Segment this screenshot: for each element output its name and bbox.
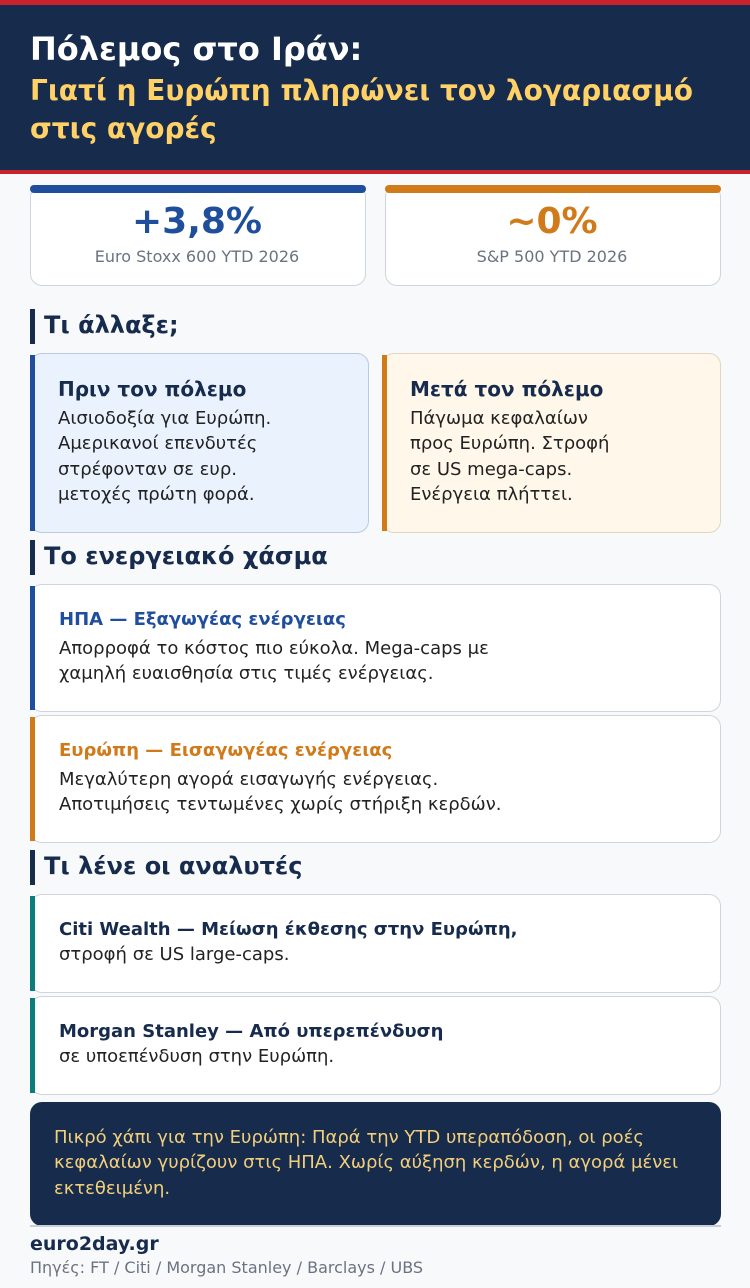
value: ~0% — [506, 201, 598, 242]
card: Europe energy importer — [30, 715, 721, 843]
card: USA energy exporter — [30, 584, 721, 712]
title: Πόλεμος στο Ιράν: — [30, 30, 362, 68]
footer sources: Πηγές: FT / Citi / Morgan Stanley / Barclays / UBS — [30, 1258, 423, 1277]
card text: Απορροφά το κόστος πιο εύκολα. Mega-caps με χαμηλή ευαισθησία στις τιμές ενέργειας. — [59, 638, 489, 684]
card: Citi Wealth — [30, 894, 721, 993]
panel: before the war — [30, 353, 369, 533]
label: Euro Stoxx 600 YTD 2026 — [95, 247, 299, 266]
card: Morgan Stanley — [30, 996, 721, 1095]
panel: after the war — [382, 353, 721, 533]
callout — [30, 1102, 721, 1226]
label: S&P 500 YTD 2026 — [477, 247, 627, 266]
heading: energy gap — [30, 540, 430, 575]
card heading: ΗΠΑ — Εξαγωγέας ενέργειας — [59, 609, 346, 630]
heading: what changed — [30, 309, 330, 344]
footer divider — [30, 1225, 721, 1227]
panel heading: Μετά τον πόλεμο — [410, 377, 603, 401]
callout: Πικρό χάπι για την Ευρώπη: Παρά την YTD υπεραπόδοση, οι ροές κεφαλαίων γυρίζουν στις ΗΠΑ. Χωρίς αύξηση κερδών, η αγορά μένει εκτεθειμένη. — [54, 1127, 678, 1199]
card heading: Ευρώπη — Εισαγωγέας ενέργειας — [59, 740, 392, 761]
panel text: Πάγωμα κεφαλαίων προς Ευρώπη. Στροφή σε US mega-caps. Ενέργεια πλήττει. — [410, 408, 609, 505]
card text: Μεγαλύτερη αγορά εισαγωγής ενέργειας. Αποτιμήσεις τεντωμένες χωρίς στήριξη κερδών. — [59, 769, 502, 815]
stat card: Euro Stoxx — [30, 185, 366, 286]
panel heading: Πριν τον πόλεμο — [58, 377, 246, 401]
stat card: S&P 500 — [385, 185, 721, 286]
card heading: Morgan Stanley — Από υπερεπένδυση — [59, 1021, 443, 1042]
header banner — [0, 0, 750, 174]
subtitle: Γιατί η Ευρώπη πληρώνει τον λογαριασμό στις αγορές — [30, 74, 693, 144]
card text: σε υποεπένδυση στην Ευρώπη. — [59, 1046, 334, 1067]
heading: analysts: Τι λένε οι αναλυτές — [44, 852, 303, 880]
card text: στροφή σε US large-caps. — [59, 944, 289, 965]
card heading: Citi Wealth — Μείωση έκθεσης στην Ευρώπη, — [59, 919, 517, 940]
heading: analysts — [30, 850, 430, 885]
footer brand: euro2day.gr — [30, 1233, 159, 1255]
heading: what changed: Τι άλλαξε; — [44, 311, 179, 339]
heading: energy gap: Το ενεργειακό χάσμα — [44, 542, 328, 570]
panel text: Αισιοδοξία για Ευρώπη. Αμερικανοί επενδυτές στρέφονταν σε ευρ. μετοχές πρώτη φορά. — [58, 408, 271, 505]
value: +3,8% — [132, 201, 262, 242]
